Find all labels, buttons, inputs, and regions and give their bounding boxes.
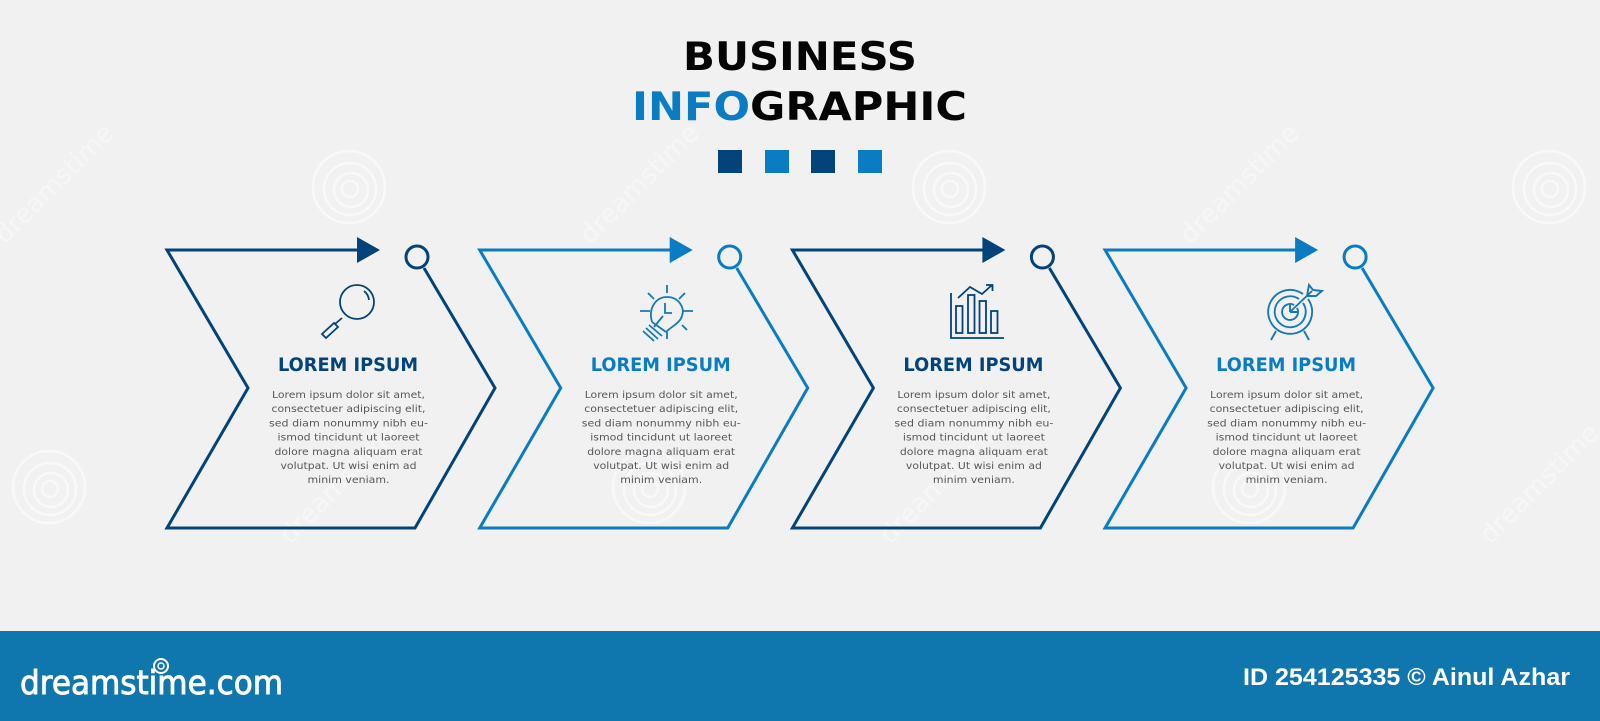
heading: LOREM IPSUM: [278, 354, 418, 376]
icon: target with arrow: [1268, 285, 1322, 340]
body text: ismod tincidunt ut laoreet: [903, 432, 1045, 444]
body text: [894, 390, 1054, 486]
icon: magnifying glass: [322, 285, 374, 338]
chevron outline with arrow and circle: [1105, 237, 1433, 528]
body text: ismod tincidunt ut laoreet: [1216, 432, 1358, 444]
watermark pattern: dreamstime: [1174, 118, 1305, 250]
body text: volutpat. Ut wisi enim ad: [1219, 461, 1355, 472]
panel: step 1: [167, 237, 495, 528]
body text: ismod tincidunt ut laoreet: [278, 432, 420, 444]
panel: step 2: [480, 237, 808, 528]
body text: minim veniam.: [308, 475, 390, 486]
heading: LOREM IPSUM: [1216, 354, 1356, 376]
body text: volutpat. Ut wisi enim ad: [280, 461, 416, 472]
body text: dolore magna aliquam erat: [900, 447, 1048, 458]
body text: volutpat. Ut wisi enim ad: [906, 461, 1042, 472]
watermark pattern: dreamstime: [574, 118, 705, 250]
chevron outline with arrow and circle: [480, 237, 808, 528]
body text: Lorem ipsum dolor sit amet,: [272, 390, 425, 401]
watermark pattern: dreamstime: [874, 418, 1005, 550]
heading: LOREM IPSUM: [591, 354, 731, 376]
body text: consectetuer adipiscing elit,: [1210, 404, 1364, 415]
body text: Lorem ipsum dolor sit amet,: [897, 390, 1050, 401]
title: [632, 35, 967, 130]
body text: Lorem ipsum dolor sit amet,: [1210, 390, 1363, 401]
body text: [1207, 390, 1367, 486]
body text: Lorem ipsum dolor sit amet,: [585, 390, 738, 401]
body text: sed diam nonummy nibh eu-: [1207, 418, 1367, 430]
body text: ismod tincidunt ut laoreet: [590, 432, 732, 444]
body text: consectetuer adipiscing elit,: [897, 404, 1051, 415]
body text: sed diam nonummy nibh eu-: [582, 418, 741, 430]
body text: [582, 390, 741, 486]
footer credit: ID 254125335 © Ainul Azhar: [1243, 664, 1570, 691]
footer logo: dreamstime.com: [20, 663, 283, 702]
decorative squares: [718, 150, 882, 173]
heading: LOREM IPSUM: [903, 354, 1043, 376]
body text: volutpat. Ut wisi enim ad: [593, 461, 729, 472]
body text: dolore magna aliquam erat: [274, 447, 423, 458]
panel: step 4: [1105, 237, 1433, 528]
body text: sed diam nonummy nibh eu-: [894, 418, 1054, 430]
watermark pattern: dreamstime: [274, 418, 405, 550]
panel: step 3: [792, 237, 1120, 528]
body text: sed diam nonummy nibh eu-: [269, 418, 428, 430]
chevron outline with arrow and circle: [792, 237, 1120, 528]
body text: [269, 390, 428, 486]
footer banner: [0, 631, 1600, 721]
icon: light bulb: [640, 285, 693, 341]
body text: dolore magna aliquam erat: [1213, 447, 1361, 458]
title: INFO GRAPHIC: [632, 85, 967, 130]
body text: dolore magna aliquam erat: [587, 447, 735, 458]
body text: minim veniam.: [1246, 475, 1328, 486]
body text: consectetuer adipiscing elit,: [584, 404, 738, 415]
chevron outline with arrow and circle: [167, 237, 495, 528]
body text: consectetuer adipiscing elit,: [272, 404, 426, 415]
watermark pattern: [0, 118, 1600, 550]
body text: minim veniam.: [620, 475, 702, 486]
icon: bar chart: [951, 285, 1004, 338]
title: BUSINESS: [683, 35, 917, 80]
body text: minim veniam.: [933, 475, 1015, 486]
